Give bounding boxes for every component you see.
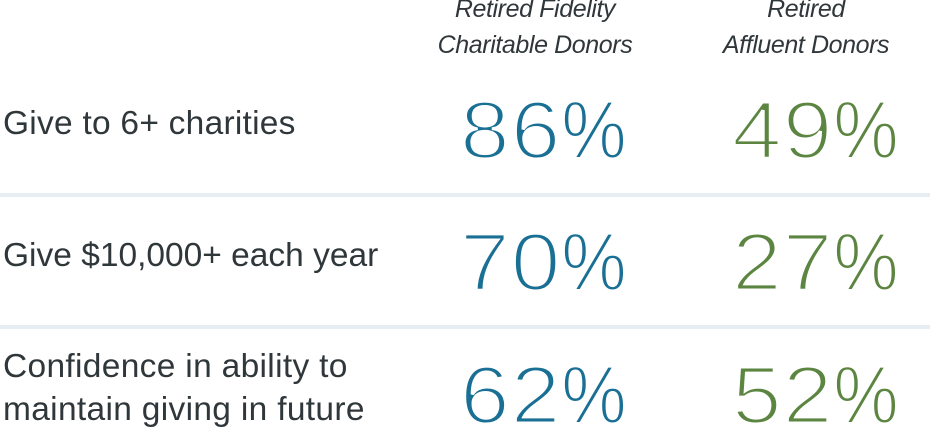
column heading: Retired Fidelity Charitable Donors: Charitable Donors [438,31,632,59]
stat: Affluent 27%: 27 [732,217,834,308]
row label: Confidence in ability to maintain giving in future: maintain giving in future [3,391,365,428]
row label: Give to 6+ charities: Give to 6+ charities [3,105,296,142]
stat: Affluent 27%: % [834,217,900,308]
stat: Fidelity 86%: % [562,85,628,176]
column heading: Retired Affluent Donors [722,0,889,59]
row label: Confidence in ability to maintain giving in future [3,348,365,428]
column heading: Retired Fidelity Charitable Donors [438,0,632,59]
stat: Fidelity 70% [460,217,628,308]
stat: Affluent 52% [732,350,900,430]
stat: Fidelity 70%: 70 [460,217,562,308]
row label: Confidence in ability to maintain giving in future: Confidence in ability to [3,348,348,385]
stat: Affluent 49%: % [834,85,900,176]
stat: Fidelity 86% [460,85,628,176]
stat: Fidelity 70%: % [562,217,628,308]
stat: Affluent 49% [732,85,900,176]
row label: Give $10,000+ each year: Give $10,000+ each year [3,237,378,274]
stat: Affluent 27% [732,217,900,308]
column heading: Retired Affluent Donors: Affluent Donors [723,31,889,59]
stat: Affluent 49%: 49 [732,85,834,176]
stat: Fidelity 62% [460,350,628,430]
stat: Fidelity 86%: 86 [460,85,562,176]
